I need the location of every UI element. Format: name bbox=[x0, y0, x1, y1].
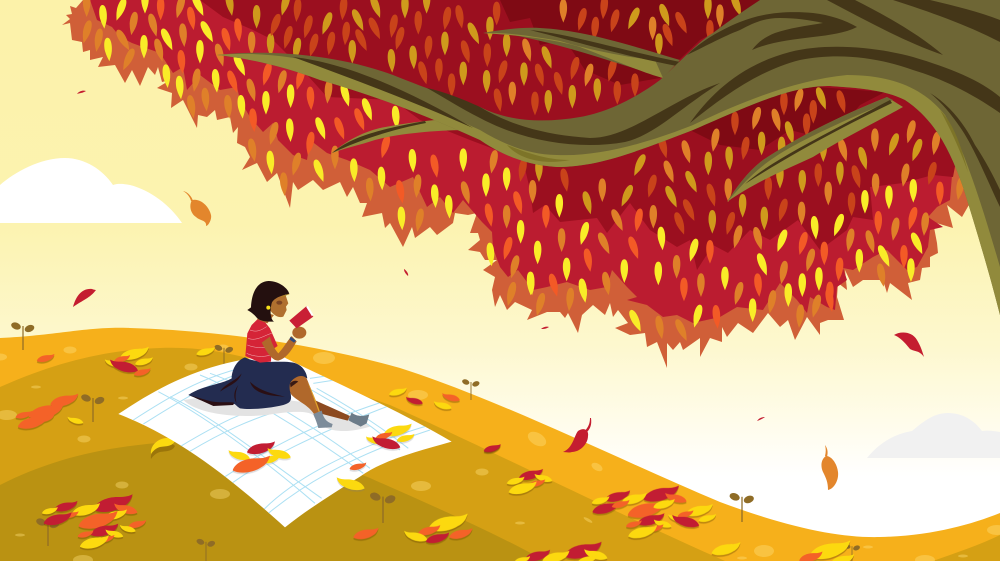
ground leaf cluster: lower slope right bbox=[484, 444, 740, 561]
tree: lower left side branch bbox=[332, 120, 470, 153]
leaves: canopy right bbox=[482, 0, 966, 307]
near foot bbox=[313, 411, 333, 428]
leg highlight bbox=[307, 382, 320, 413]
leaves: canopy lower fringe bbox=[504, 271, 721, 342]
tree: main trunk and branch bbox=[217, 0, 1000, 315]
falling leaf: orange top left bbox=[183, 191, 211, 226]
falling leaf: red right bbox=[894, 332, 924, 357]
bracelet bbox=[289, 337, 296, 343]
ground leaf cluster: upper left bbox=[37, 347, 153, 376]
ground leaf cluster: on blanket centre bbox=[228, 441, 366, 490]
shirt bbox=[245, 319, 278, 363]
tree: dark bark streaks bbox=[293, 0, 1000, 207]
face bbox=[270, 293, 288, 317]
ground: far right hill bbox=[933, 535, 1000, 561]
ground: front hill bbox=[0, 442, 545, 561]
ground: light spots bbox=[0, 344, 1000, 561]
falling leaf: red centre bbox=[563, 418, 591, 452]
book pages bbox=[306, 306, 313, 316]
tree: upper side branch bbox=[483, 28, 680, 78]
woman reading bbox=[188, 281, 369, 428]
far foot bbox=[348, 413, 369, 427]
leaves: canopy left bbox=[80, 0, 482, 232]
earring bbox=[266, 306, 270, 310]
canopy: darkest foliage near the branches bbox=[500, 0, 770, 85]
cloud: left bbox=[0, 158, 182, 223]
ground leaf: yellow by blanket bbox=[151, 438, 175, 454]
inner knee shadow bbox=[290, 381, 298, 387]
shirt stripes bbox=[247, 327, 272, 356]
book bbox=[289, 306, 313, 328]
ground: back orange hill bbox=[0, 328, 1000, 561]
sprouts bbox=[10, 321, 861, 561]
ground leaf cluster: bottom right bbox=[799, 540, 854, 561]
woman's shadow on blanket bbox=[183, 393, 370, 431]
arm bbox=[262, 336, 297, 361]
far leg bbox=[303, 395, 350, 421]
skirt bbox=[188, 357, 307, 409]
ground leaf cluster: far left orange bbox=[16, 394, 83, 429]
ground leaf cluster: bottom left bbox=[42, 494, 146, 549]
canopy: bright red foliage bbox=[90, 0, 1000, 323]
tiny falling leaves bbox=[77, 91, 765, 421]
canopy: outer orange foliage bbox=[62, 0, 1000, 368]
hand bbox=[292, 327, 306, 339]
tree: right side branch bbox=[727, 97, 903, 202]
ground leaves: middle slope bbox=[196, 347, 501, 543]
neck bbox=[257, 312, 274, 323]
skirt folds bbox=[190, 373, 285, 406]
canopy: darkest foliage under the branch bbox=[690, 85, 885, 150]
ground: middle hill bbox=[0, 348, 725, 561]
falling leaf: orange right bbox=[821, 445, 838, 490]
hair bbox=[247, 281, 289, 322]
canopy: dark red inner foliage bbox=[200, 0, 1000, 270]
blanket grid lines bbox=[133, 368, 430, 513]
tree: lit underside of the branch bbox=[217, 54, 1000, 315]
leaves: canopy lower right fringe bbox=[749, 288, 836, 328]
hair highlight bbox=[282, 294, 289, 297]
near leg bbox=[290, 376, 320, 414]
picnic blanket bbox=[118, 355, 452, 527]
cloud: right bbox=[867, 413, 1000, 458]
cheek bbox=[276, 301, 282, 305]
falling leaf: red left bbox=[73, 289, 96, 307]
ground leaf cluster: on blanket right bbox=[366, 424, 414, 449]
